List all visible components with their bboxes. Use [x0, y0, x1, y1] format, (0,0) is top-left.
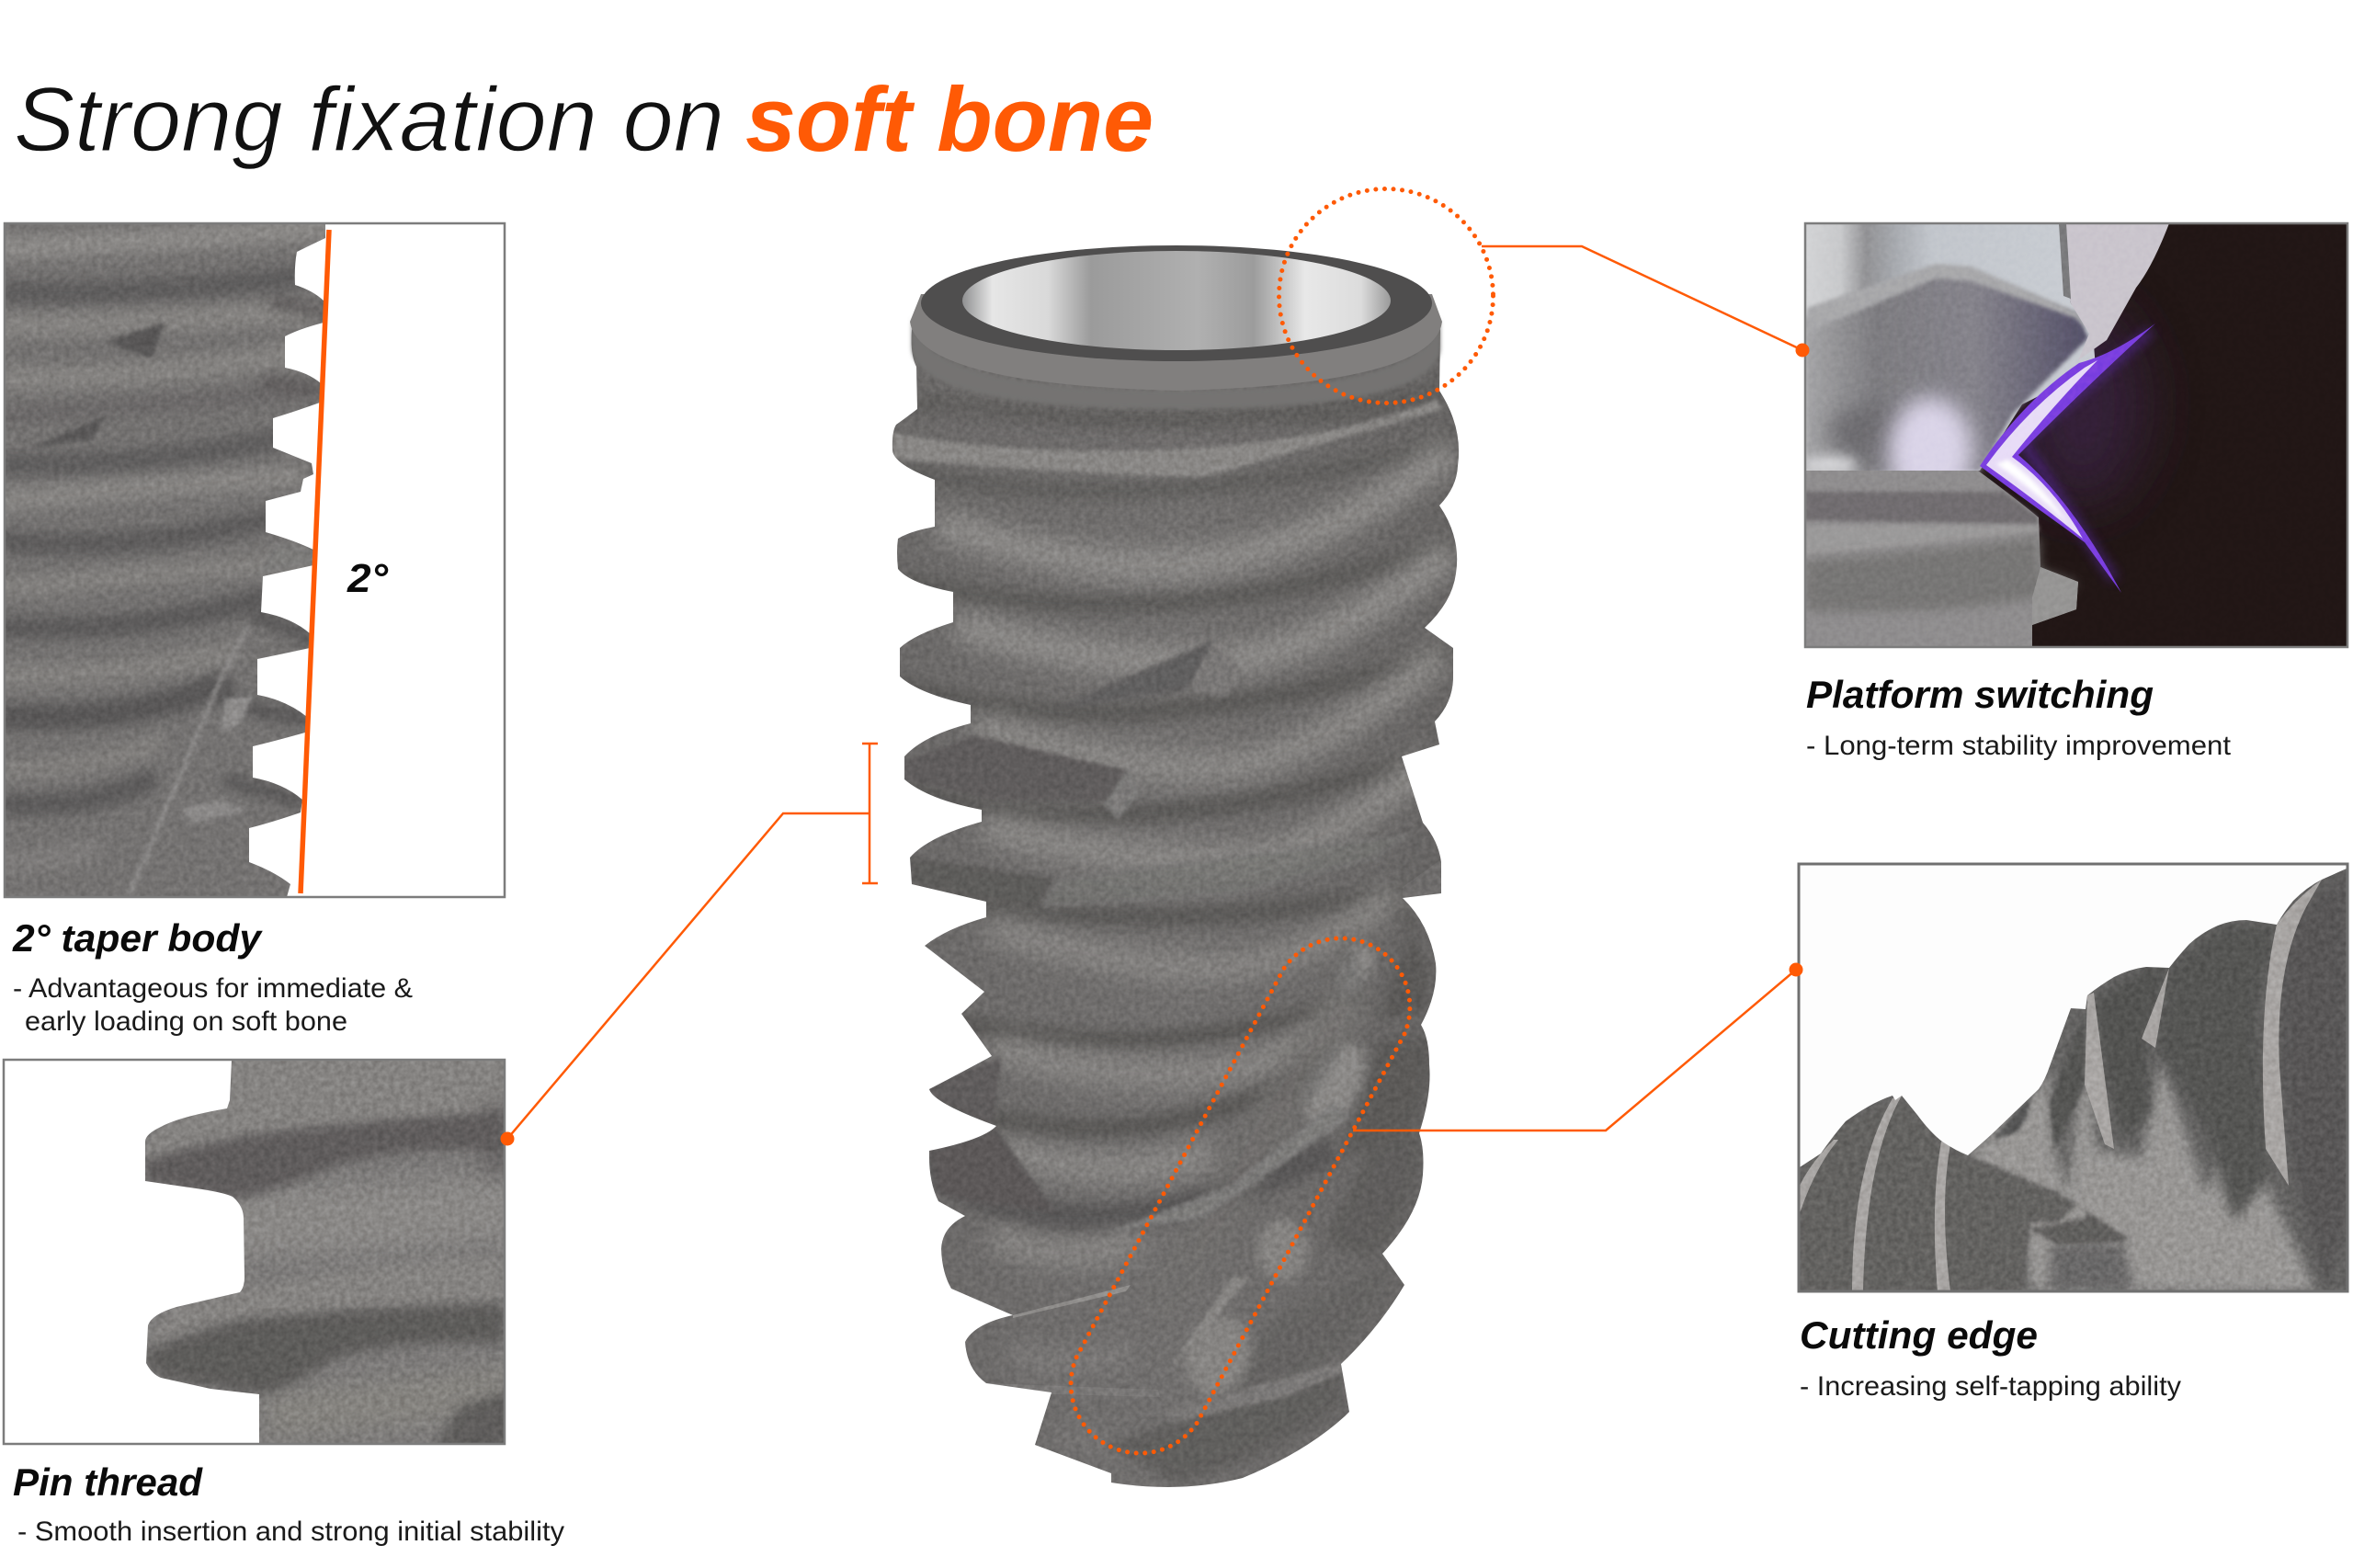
arrow: pin thread leader	[500, 813, 870, 1145]
text: cutting edge	[1800, 1313, 2181, 1402]
panel: platform switching photo	[1802, 223, 2347, 647]
arrow: cutting edge leader	[1353, 963, 1803, 1131]
text: pin thread: Pin thread	[13, 1460, 203, 1504]
purple discharge glow	[1980, 324, 2155, 593]
panel: cutting edge photo	[1799, 864, 2347, 1291]
title: soft bone	[745, 68, 1154, 170]
panel: pin thread photo	[4, 1057, 515, 1452]
text: 2 degree taper body: 2° taper body	[12, 916, 264, 960]
callout circle: platform	[1279, 189, 1493, 403]
central dental implant	[882, 245, 1471, 1498]
text: 2 degree taper body	[12, 916, 413, 1037]
label: 2 degrees: 2°	[347, 556, 388, 601]
implant rim face	[910, 294, 1442, 409]
sharp thread facets	[892, 400, 1443, 477]
panel: 2 degree taper body photo	[5, 223, 505, 897]
taper guide line	[301, 230, 329, 893]
arrow: platform leader	[1482, 246, 1809, 357]
bracket: thread pitch	[862, 744, 878, 883]
implant inner cup	[962, 251, 1391, 350]
text: pin thread	[13, 1460, 564, 1547]
text: platform switching: Platform switching	[1806, 673, 2154, 716]
root highlight bands	[938, 418, 1452, 1446]
implant platform ring	[921, 245, 1432, 361]
dark thread lobes on the right	[1103, 905, 1434, 1484]
text: 2 degree taper body: - Advantageous for immediate &	[13, 973, 413, 1004]
callout capsule: cutting edge	[1071, 938, 1410, 1453]
strip highlights	[1800, 1140, 1838, 1213]
text: cutting edge: Cutting edge	[1800, 1313, 2038, 1357]
text: cutting edge: - Increasing self-tapping ability	[1800, 1371, 2181, 1402]
title: Strong fixation on	[14, 68, 724, 170]
lower implant collar	[1805, 471, 2078, 646]
text: 2 degree taper body: early loading on soft bone	[25, 1006, 347, 1037]
text: pin thread: - Smooth insertion and strong initial stability	[17, 1517, 564, 1547]
sleeve tip	[2059, 223, 2169, 360]
text: platform switching: - Long-term stability improvement	[1806, 731, 2232, 761]
light flute surface	[1965, 1031, 2318, 1290]
text: platform switching	[1806, 673, 2232, 761]
title	[14, 68, 1154, 170]
dark flank bands	[892, 395, 1456, 1218]
flute highlights	[1183, 943, 1377, 1397]
